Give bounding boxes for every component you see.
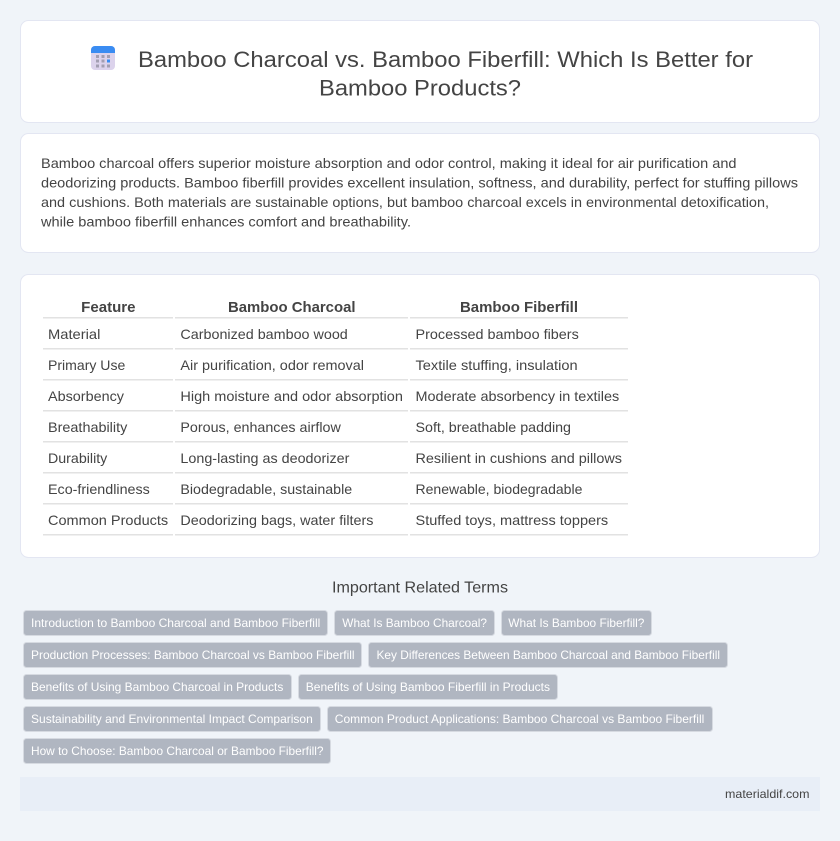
tag: Key Differences Between Bamboo Charcoal and Bamboo Fiberfill xyxy=(376,648,720,662)
text block: summary: Bamboo charcoal offers superior moisture absorption and odor control, making it ideal for air purification and xyxy=(41,155,736,171)
table row: durability: Resilient in cushions and pillows xyxy=(416,450,622,466)
tag xyxy=(24,706,320,732)
table row: absorbency: Moderate absorbency in textiles xyxy=(416,388,619,404)
tag xyxy=(24,610,328,636)
panel: summary paragraph xyxy=(20,134,820,252)
title: Bamboo Charcoal vs. Bamboo Fiberfill: Which Is Better for xyxy=(138,47,753,72)
table row: absorbency xyxy=(48,388,619,404)
table grid lines xyxy=(43,317,628,536)
heading: important related terms: Important Related Terms xyxy=(332,580,508,596)
table row: material: Carbonized bamboo wood xyxy=(180,326,348,342)
tag: Production Processes: Bamboo Charcoal vs Bamboo Fiberfill xyxy=(31,648,355,662)
table row: absorbency: Absorbency xyxy=(48,388,124,404)
table row: absorbency: High moisture and odor absorption xyxy=(180,388,403,404)
text block: summary: while bamboo fiberfill enhances comfort and breathability. xyxy=(40,214,411,230)
tag: Sustainability and Environmental Impact Comparison xyxy=(31,712,313,726)
table row: durability: Long-lasting as deodorizer xyxy=(180,450,350,466)
tag xyxy=(298,674,558,700)
table row: primary use: Primary Use xyxy=(48,357,126,373)
table row: common products: Common Products xyxy=(48,512,168,528)
table row: eco-friendliness: Renewable, biodegradable xyxy=(416,481,583,497)
table row: durability xyxy=(48,450,622,466)
table row: primary use: Textile stuffing, insulation xyxy=(416,357,578,373)
title xyxy=(138,47,753,100)
tag xyxy=(24,674,292,700)
table header row xyxy=(81,299,578,316)
tag: How to Choose: Bamboo Charcoal or Bamboo Fiberfill? xyxy=(31,744,324,758)
table row: primary use: Air purification, odor removal xyxy=(180,357,364,373)
text block: summary: and cushions. Both materials are sustainable options, but bamboo charcoal excels in environmental detoxification, xyxy=(41,194,769,210)
text block: summary xyxy=(40,155,798,230)
tag: Common Product Applications: Bamboo Charcoal vs Bamboo Fiberfill xyxy=(335,712,704,726)
footer site name: materialdif.com xyxy=(725,787,810,801)
tag: Benefits of Using Bamboo Fiberfill in Products xyxy=(306,680,550,694)
table row: breathability: Breathability xyxy=(48,419,127,435)
tag xyxy=(368,642,728,668)
panel: title card xyxy=(20,20,820,122)
panel: related term tags xyxy=(24,610,728,764)
table header row: Bamboo Fiberfill xyxy=(460,299,578,316)
tag: What Is Bamboo Charcoal? xyxy=(342,616,487,630)
tag xyxy=(24,738,330,764)
tag xyxy=(334,610,494,636)
table row: eco-friendliness: Eco-friendliness xyxy=(48,481,150,497)
tag xyxy=(328,706,712,732)
icon: calendar grid xyxy=(91,46,115,70)
table row: breathability: Porous, enhances airflow xyxy=(180,419,342,435)
panel: footer xyxy=(20,777,820,811)
table row: eco-friendliness xyxy=(48,481,583,497)
table header row: Bamboo Charcoal xyxy=(228,299,356,316)
table row: material: Material xyxy=(48,326,100,342)
table header row: Feature xyxy=(81,299,136,316)
table row: common products: Deodorizing bags, water filters xyxy=(180,512,374,528)
table row: material xyxy=(48,326,579,342)
tag: Introduction to Bamboo Charcoal and Bamboo Fiberfill xyxy=(31,616,320,630)
table row: breathability: Soft, breathable padding xyxy=(416,419,571,435)
panel: comparison table xyxy=(20,274,820,558)
table row: eco-friendliness: Biodegradable, sustainable xyxy=(180,481,352,497)
tag xyxy=(24,642,362,668)
text block: summary: deodorizing products. Bamboo fiberfill provides excellent insulation, softness, and durability, perfect for stuffing pillows xyxy=(41,174,798,190)
title: Bamboo Products? xyxy=(319,76,521,100)
tag: Benefits of Using Bamboo Charcoal in Products xyxy=(31,680,283,694)
table row: breathability xyxy=(48,419,571,435)
table row: durability: Durability xyxy=(48,450,107,466)
table row: common products: Stuffed toys, mattress toppers xyxy=(416,512,608,528)
tag xyxy=(502,610,652,636)
table row: primary use xyxy=(48,357,578,373)
tag: What Is Bamboo Fiberfill? xyxy=(508,616,645,630)
table row: material: Processed bamboo fibers xyxy=(416,326,579,342)
table row: common products xyxy=(48,512,608,528)
